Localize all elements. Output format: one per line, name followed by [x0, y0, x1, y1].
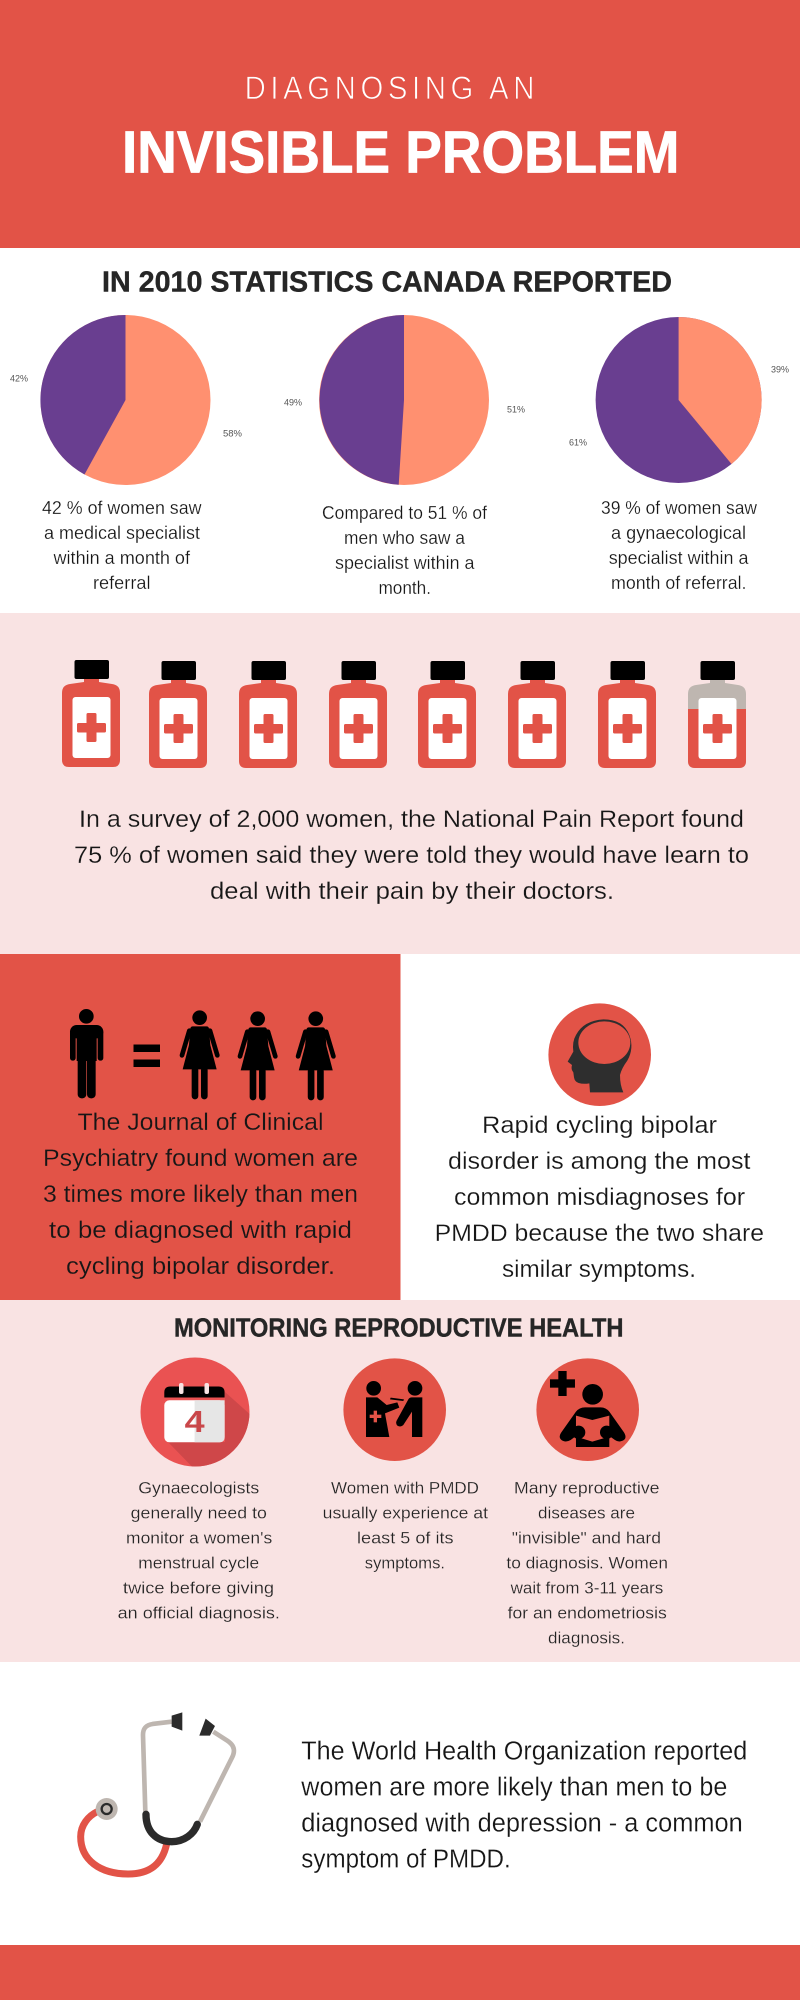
text: journal finding: to be diagnosed with rapid — [49, 1217, 352, 1244]
caption: gynaecologists: Gynaecologists — [138, 1479, 259, 1497]
icon: person reading book with cross — [536, 1358, 639, 1461]
caption: invisible diseases: to diagnosis. Women — [506, 1554, 668, 1572]
caption: women medical specialist: a medical specialist — [44, 523, 200, 543]
icon: bottle 2 — [149, 661, 207, 768]
panel: journal of clinical psychiatry — [0, 954, 400, 1300]
caption: men specialist: men who saw a — [344, 528, 466, 548]
icon: man — [70, 1009, 103, 1098]
panel: monitoring reproductive health — [0, 1300, 800, 1662]
text: journal finding: Psychiatry found women are — [43, 1145, 358, 1172]
caption: men specialist: month. — [378, 578, 431, 598]
caption: invisible diseases: diagnosis. — [548, 1629, 625, 1647]
icon: bottle 5 — [418, 661, 476, 768]
text: national pain report: deal with their pain by their doctors. — [210, 878, 614, 905]
text: national pain report: In a survey of 2,000 women, the National Pain Report found — [79, 806, 744, 833]
panel: world health organization — [0, 1662, 800, 1945]
caption: men specialist: specialist within a — [335, 553, 475, 573]
text: world health organization: The World Health Organization reported — [301, 1737, 747, 1765]
text: journal finding: The Journal of Clinical — [78, 1109, 324, 1136]
text: world health organization — [300, 1737, 747, 1873]
icon: bottle 4 — [329, 661, 387, 768]
pie chart: men specialist: 51% — [507, 404, 526, 416]
text: rapid cycling — [435, 1112, 764, 1283]
footer band — [0, 1945, 800, 2000]
caption: men specialist: Compared to 51 % of — [322, 503, 488, 523]
icon: man equals three women — [70, 1009, 333, 1100]
icon: bottle 7 — [598, 661, 656, 768]
icon: woman 1 — [182, 1010, 217, 1099]
icon: bottle 1 — [62, 660, 120, 767]
icon: woman 2 — [240, 1011, 275, 1100]
heading: monitoring reproductive health: MONITORING REPRODUCTIVE HEALTH — [174, 1314, 624, 1342]
heading: statistics canada: IN 2010 STATISTICS CANADA REPORTED — [102, 266, 672, 298]
pie chart: women gynaecological specialist: 61% — [569, 438, 588, 448]
text: rapid cycling: common misdiagnoses for — [454, 1184, 745, 1211]
caption: invisible diseases: Many reproductive — [514, 1479, 660, 1497]
caption: women medical specialist: referral — [93, 573, 150, 593]
caption: invisible diseases: for an endometriosis — [508, 1604, 667, 1622]
caption: PMDD symptoms: usually experience at — [323, 1504, 488, 1522]
caption: women gynaecological specialist: 39 % of women saw — [601, 498, 758, 518]
icon: calendar — [140, 1358, 250, 1466]
text: world health organization: women are more likely than men to be — [300, 1773, 727, 1801]
caption: women gynaecological specialist: specialist within a — [609, 548, 749, 568]
text: national pain report — [74, 806, 749, 905]
pie chart: women gynaecological specialist — [569, 317, 790, 483]
text: rapid cycling: PMDD because the two share — [435, 1220, 764, 1247]
caption: women gynaecological specialist — [601, 498, 758, 593]
text: journal finding: 3 times more likely than men — [43, 1181, 358, 1208]
title line one: DIAGNOSING AN — [245, 70, 539, 106]
panel: statistics canada pies — [0, 248, 800, 613]
caption: women medical specialist: 42 % of women saw — [42, 498, 202, 518]
text: rapid cycling: similar symptoms. — [502, 1256, 696, 1283]
panel: rapid cycling misdiagnosis — [400, 954, 800, 1300]
text: world health organization: symptom of PMDD. — [301, 1845, 511, 1873]
caption: gynaecologists: monitor a women's — [126, 1529, 272, 1547]
caption: women gynaecological specialist: a gynaecological — [611, 523, 746, 543]
text: rapid cycling: Rapid cycling bipolar — [482, 1112, 717, 1139]
pie chart: women medical specialist — [10, 315, 243, 485]
pie chart: women gynaecological specialist: 39% — [771, 364, 790, 376]
caption: women medical specialist: within a month of — [52, 548, 191, 568]
text: journal finding: cycling bipolar disorder. — [66, 1253, 335, 1280]
caption: PMDD symptoms: Women with PMDD — [331, 1479, 479, 1497]
caption: invisible diseases: diseases are — [538, 1504, 635, 1522]
icon: head silhouette in circle — [548, 1003, 651, 1106]
icon: woman 3 — [298, 1011, 333, 1100]
caption: invisible diseases: wait from 3-11 years — [510, 1579, 663, 1597]
caption: gynaecologists: generally need to — [131, 1504, 267, 1522]
icon: bottle 6 — [508, 661, 566, 768]
caption: gynaecologists: an official diagnosis. — [118, 1604, 280, 1622]
pie chart: men specialist — [284, 315, 526, 485]
title line two: INVISIBLE PROBLEM — [122, 120, 679, 186]
icon: stethoscope — [81, 1712, 234, 1874]
caption: gynaecologists: menstrual cycle — [138, 1554, 259, 1572]
pie chart: women medical specialist: 42% — [10, 374, 29, 384]
caption: women gynaecological specialist: month of referral. — [611, 573, 746, 593]
icon: calendar: 4 — [185, 1404, 205, 1439]
text: journal finding — [43, 1109, 358, 1280]
caption: gynaecologists — [118, 1479, 280, 1622]
icon: doctor and patient with syringe — [343, 1358, 446, 1461]
pictogram: eight medicine bottles — [62, 660, 746, 768]
caption: women medical specialist — [42, 498, 202, 593]
caption: PMDD symptoms: least 5 of its — [357, 1529, 454, 1547]
caption: PMDD symptoms — [323, 1479, 488, 1572]
caption: invisible diseases — [506, 1479, 668, 1647]
pie chart: men specialist: 49% — [284, 398, 303, 408]
header banner — [0, 0, 800, 248]
icon: equals sign — [134, 1044, 160, 1067]
caption: invisible diseases: "invisible" and hard — [512, 1529, 661, 1547]
caption: gynaecologists: twice before giving — [123, 1579, 274, 1597]
pie chart: women medical specialist: 58% — [223, 428, 243, 440]
text: world health organization: diagnosed with depression - a common — [301, 1809, 743, 1837]
caption: PMDD symptoms: symptoms. — [365, 1554, 445, 1572]
text: national pain report: 75 % of women said they were told they would have learn to — [74, 842, 749, 869]
text: rapid cycling: disorder is among the most — [448, 1148, 751, 1175]
caption: men specialist — [322, 503, 488, 598]
panel: national pain report — [0, 613, 800, 954]
icon: bottle 8 three quarters full — [688, 661, 746, 768]
icon: bottle 3 — [239, 661, 297, 768]
